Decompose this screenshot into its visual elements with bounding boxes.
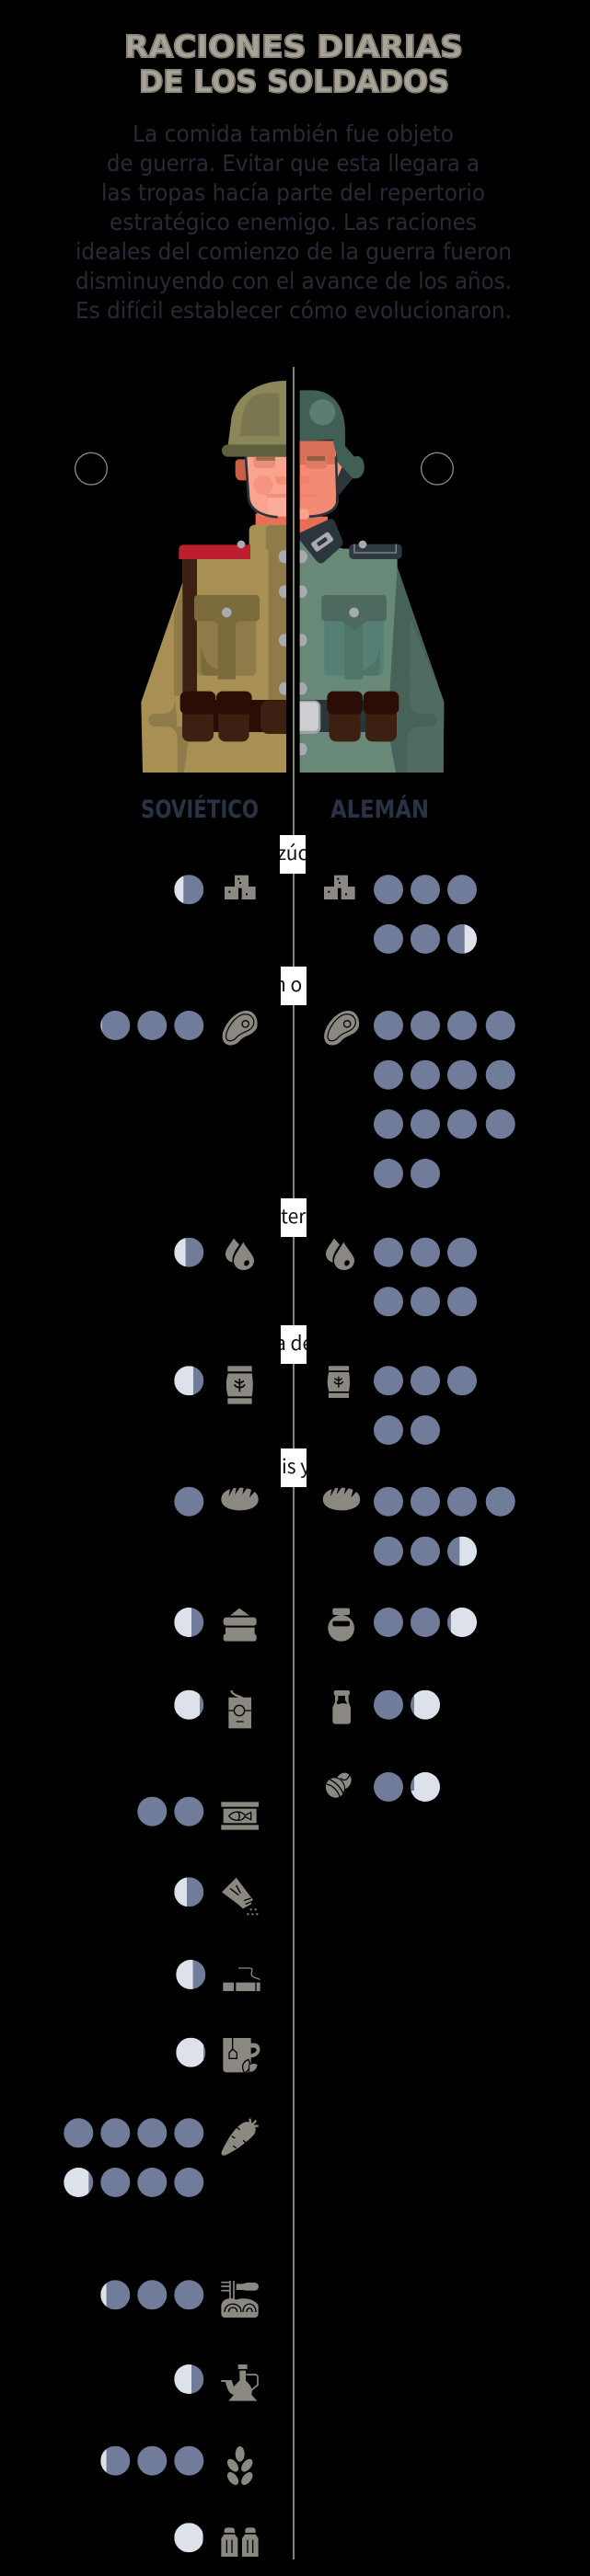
icon: steak german: [324, 1011, 359, 1046]
soviet dot: oil: [174, 2364, 203, 2394]
soviet half: [141, 381, 286, 773]
german half: [300, 390, 444, 773]
intro text: La comida también fue objeto: [133, 120, 454, 147]
icon: tea mug: [223, 2038, 260, 2073]
icon: pot: [328, 1609, 354, 1642]
icon: cigarette: [223, 1968, 260, 1991]
icon: sack: [224, 1609, 257, 1642]
label box: carne: [281, 967, 307, 1005]
soviet dot: tomato can: [174, 1690, 203, 1720]
german dots: meat: [374, 1011, 515, 1188]
row: grasas: [174, 1238, 477, 1316]
intro text: las tropas hacía parte del repertorio: [101, 179, 485, 206]
row: cigarette: [176, 1960, 260, 1991]
heading: alemán: ALEMÁN: [330, 795, 429, 824]
right empty circle marker: [422, 452, 453, 485]
intro text: [75, 120, 512, 324]
icon: bread soviet: [221, 1485, 259, 1510]
row: salt shaker: [174, 1877, 258, 1915]
german dots: sugar: [374, 875, 478, 954]
german dots: milk: [374, 1690, 440, 1720]
icon: barrel german: [328, 1366, 350, 1398]
german dots: flour: [374, 1366, 477, 1445]
icon: salt and pepper: [221, 2527, 259, 2557]
title: RACIONES DIARIAS: [124, 29, 463, 64]
icon: barrel soviet: [226, 1366, 253, 1404]
german dots: coffee: [374, 1772, 440, 1803]
row: harina: [174, 1366, 477, 1445]
soviet dot: tobacco: [176, 1960, 205, 1989]
row: can and milk: [174, 1690, 440, 1728]
intro text: ideales del comienzo de la guerra fueron: [75, 238, 512, 265]
row: sack and pot: [174, 1608, 477, 1642]
row: carne: [100, 1011, 515, 1188]
title: RACIONES DIARIAS: [124, 29, 463, 64]
icon: wheat: [225, 2446, 255, 2487]
soviet dot: sack: [174, 1608, 203, 1637]
intro text: Es difícil establecer cómo evolucionaron.: [75, 297, 512, 324]
heading: soviético: SOVIÉTICO: [141, 795, 259, 824]
icon: pasta fork: [221, 2281, 259, 2318]
intro text: disminuyendo con el avance de los años.: [75, 268, 512, 294]
soviet dots: vegetables: [64, 2118, 203, 2197]
label box: pan: [281, 1448, 307, 1487]
icon: fish tin: [221, 1802, 259, 1830]
soviet dots: meat: [100, 1011, 203, 1040]
icon: drops german: [326, 1239, 354, 1270]
row: oil: [174, 2364, 258, 2401]
soviet dots: grain: [100, 2446, 203, 2476]
row: pasta: [100, 2280, 259, 2318]
soviet dots: flour: [174, 1366, 203, 1395]
icon: sugar cubes german: [324, 876, 355, 899]
intro text: de guerra. Evitar que esta llegara a: [107, 150, 480, 177]
row: coffee: [326, 1772, 440, 1802]
icon: drops soviet: [226, 1239, 254, 1270]
title: [124, 29, 463, 99]
row: carrot: [64, 2118, 259, 2197]
intro text: estratégico enemigo. Las raciones: [110, 209, 477, 235]
title: DE LOS SOLDADOS: [139, 63, 449, 99]
left empty circle marker: [75, 452, 107, 485]
german dots: fats: [374, 1238, 477, 1316]
icon: shaker: [222, 1878, 258, 1915]
soviet dots: pasta: [100, 2280, 203, 2309]
title: DE LOS SOLDADOS: [139, 63, 449, 99]
icon: coffee beans: [322, 1770, 354, 1802]
soldier illustration: [75, 381, 453, 773]
icon: tomato can: [228, 1690, 251, 1728]
soviet dots: sugar: [174, 875, 203, 904]
icon: steak soviet: [223, 1011, 258, 1046]
soviet dot: condiments: [174, 2523, 203, 2552]
icon: milk bottle: [332, 1690, 351, 1724]
icon: bread german: [323, 1485, 360, 1510]
icon: oil jug: [221, 2364, 258, 2401]
center divider line: [293, 367, 295, 2559]
row: azúcar: [174, 875, 478, 954]
soviet dot: tea: [176, 2038, 205, 2067]
row: fish tin: [137, 1797, 259, 1830]
row: condiments: [174, 2523, 259, 2557]
soviet dots: bread: [174, 1487, 203, 1517]
german dots: bread: [374, 1487, 515, 1566]
soviet dots: fish: [137, 1797, 203, 1826]
soviet dots: fats: [174, 1238, 203, 1267]
soviet dot: shaker: [174, 1877, 203, 1906]
german dots: pot: [374, 1608, 477, 1637]
row: tea: [176, 2038, 260, 2073]
row: grain: [100, 2446, 255, 2487]
icon: carrot: [222, 2119, 259, 2156]
row: pan: [174, 1485, 515, 1566]
icon: sugar cubes soviet: [225, 876, 256, 899]
